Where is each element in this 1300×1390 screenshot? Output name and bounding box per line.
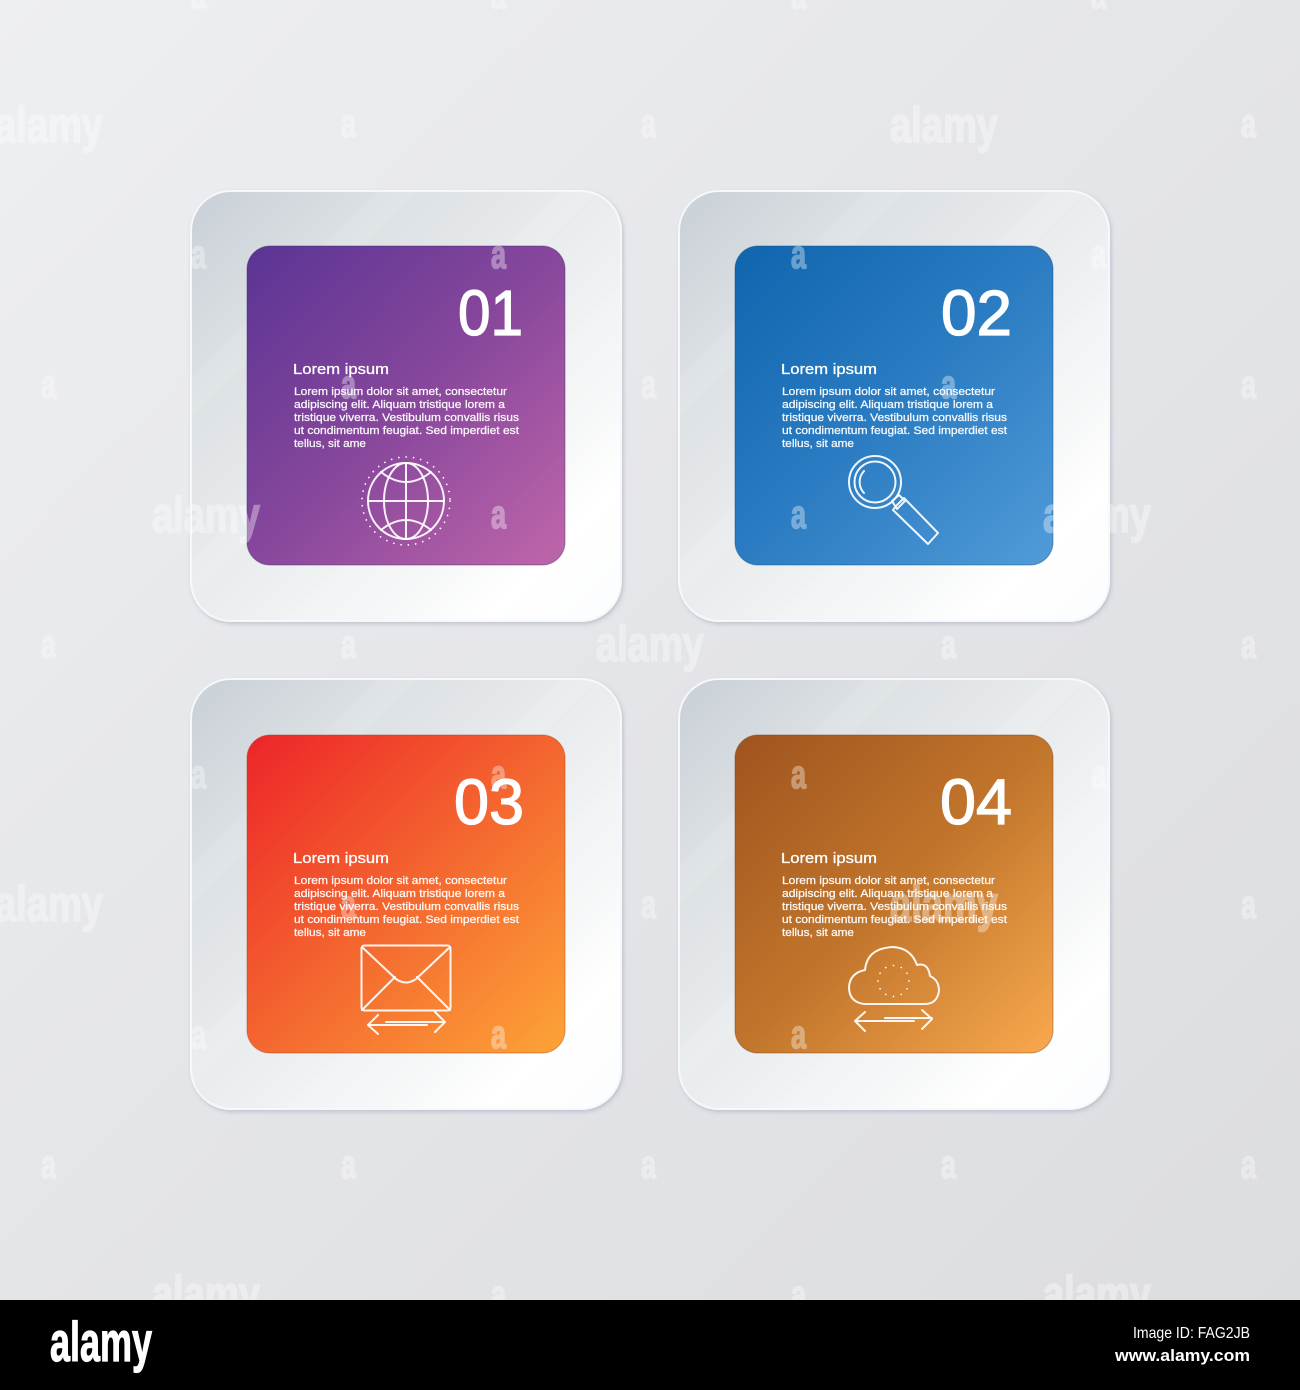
colour panel xyxy=(735,735,1053,1053)
card frame xyxy=(191,679,621,1109)
watermarks: a xyxy=(1091,753,1107,797)
heading: Lorem ipsum xyxy=(781,361,877,378)
body text: ut condimentum feugiat. Sed imperdiet est xyxy=(294,425,520,437)
body text xyxy=(294,386,520,450)
watermarks: a xyxy=(41,1143,57,1187)
body text: Lorem ipsum dolor sit amet, consectetur xyxy=(294,875,507,887)
body text: tristique viverra. Vestibulum convallis risus xyxy=(294,412,519,424)
watermarks: a xyxy=(1091,1013,1107,1057)
watermarks: a xyxy=(1091,233,1107,277)
number: 03 xyxy=(454,766,524,838)
body text: adipiscing elit. Aliquam tristique lorem a xyxy=(782,399,994,411)
footer logo: alamy xyxy=(50,1310,152,1373)
frame light stripes xyxy=(190,678,622,1110)
body text: adipiscing elit. Aliquam tristique lorem a xyxy=(782,888,994,900)
watermarks: alamy xyxy=(596,616,704,672)
panel: card 03 xyxy=(190,678,622,1110)
watermarks: a xyxy=(1241,883,1257,927)
watermarks: a xyxy=(1241,102,1257,146)
body text: ut condimentum feugiat. Sed imperdiet est xyxy=(782,425,1008,437)
panel: card 02 xyxy=(678,190,1110,622)
watermarks: a xyxy=(491,1273,507,1317)
body text xyxy=(294,875,520,939)
colour panel xyxy=(735,246,1053,565)
icon: cloud with arrows xyxy=(849,947,939,1031)
body text: Lorem ipsum dolor sit amet, consectetur xyxy=(782,386,995,398)
watermarks: alamy xyxy=(890,97,998,153)
watermarks: a xyxy=(791,493,807,537)
watermarks: a xyxy=(491,753,507,797)
panel: card 01 xyxy=(190,190,622,622)
icon: magnifying glass xyxy=(849,456,938,544)
icon: envelope with arrows xyxy=(362,946,450,1034)
watermarks: a xyxy=(341,363,357,407)
watermarks: alamy xyxy=(1043,487,1151,543)
body text: tellus, sit ame xyxy=(294,927,366,939)
colour panel xyxy=(247,246,565,565)
card frame xyxy=(191,191,621,621)
number: 01 xyxy=(458,277,523,349)
frame light stripes xyxy=(678,678,1110,1110)
watermarks: a xyxy=(191,233,207,277)
body text: adipiscing elit. Aliquam tristique lorem a xyxy=(294,888,506,900)
body text: ut condimentum feugiat. Sed imperdiet est xyxy=(782,914,1008,926)
body text: tellus, sit ame xyxy=(294,438,366,450)
watermarks: a xyxy=(791,233,807,277)
body text: tellus, sit ame xyxy=(782,927,854,939)
site url: www.alamy.com xyxy=(1114,1346,1250,1365)
watermarks: a xyxy=(341,883,357,927)
watermarks: a xyxy=(1241,1143,1257,1187)
card frame xyxy=(679,191,1109,621)
frame light stripes xyxy=(190,190,622,622)
card frame xyxy=(679,679,1109,1109)
watermarks: a xyxy=(941,363,957,407)
body text: adipiscing elit. Aliquam tristique lorem a xyxy=(294,399,506,411)
heading: Lorem ipsum xyxy=(293,361,389,378)
watermarks: a xyxy=(491,493,507,537)
body text: tristique viverra. Vestibulum convallis risus xyxy=(294,901,519,913)
watermarks: alamy xyxy=(1043,1266,1151,1322)
body text: ut condimentum feugiat. Sed imperdiet est xyxy=(294,914,520,926)
body text xyxy=(782,386,1008,450)
number: 04 xyxy=(940,766,1012,838)
watermarks: a xyxy=(341,102,357,146)
watermarks: a xyxy=(791,1273,807,1317)
colour panel xyxy=(247,735,565,1053)
panel: card 04 xyxy=(678,678,1110,1110)
body text: Lorem ipsum dolor sit amet, consectetur xyxy=(782,875,995,887)
watermarks: a xyxy=(1241,623,1257,667)
number: 02 xyxy=(941,277,1012,349)
frame light stripes xyxy=(678,190,1110,622)
watermarks: a xyxy=(341,623,357,667)
watermarks: a xyxy=(191,753,207,797)
watermarks: alamy xyxy=(890,876,998,932)
watermarks: a xyxy=(341,1143,357,1187)
body text xyxy=(782,875,1008,939)
watermarks: a xyxy=(641,883,657,927)
body text: tristique viverra. Vestibulum convallis risus xyxy=(782,901,1007,913)
watermarks: a xyxy=(641,1143,657,1187)
watermarks: a xyxy=(491,1013,507,1057)
footer bar xyxy=(0,1300,1300,1390)
heading: Lorem ipsum xyxy=(293,850,389,867)
body text: Lorem ipsum dolor sit amet, consectetur xyxy=(294,386,507,398)
watermarks: a xyxy=(641,102,657,146)
watermarks: a xyxy=(41,363,57,407)
watermarks: a xyxy=(41,623,57,667)
watermarks: a xyxy=(641,363,657,407)
watermarks: a xyxy=(941,1143,957,1187)
watermarks: a xyxy=(191,1013,207,1057)
icon: globe xyxy=(362,457,450,545)
body text: tellus, sit ame xyxy=(782,438,854,450)
watermarks: a xyxy=(941,623,957,667)
body text: tristique viverra. Vestibulum convallis risus xyxy=(782,412,1007,424)
image id: Image ID: FAG2JB xyxy=(1133,1325,1250,1342)
watermarks: a xyxy=(1241,363,1257,407)
watermarks: a xyxy=(791,1013,807,1057)
watermarks: alamy xyxy=(152,1266,260,1322)
watermarks: alamy xyxy=(152,487,260,543)
watermarks: a xyxy=(491,233,507,277)
watermarks: a xyxy=(791,753,807,797)
heading: Lorem ipsum xyxy=(781,850,877,867)
